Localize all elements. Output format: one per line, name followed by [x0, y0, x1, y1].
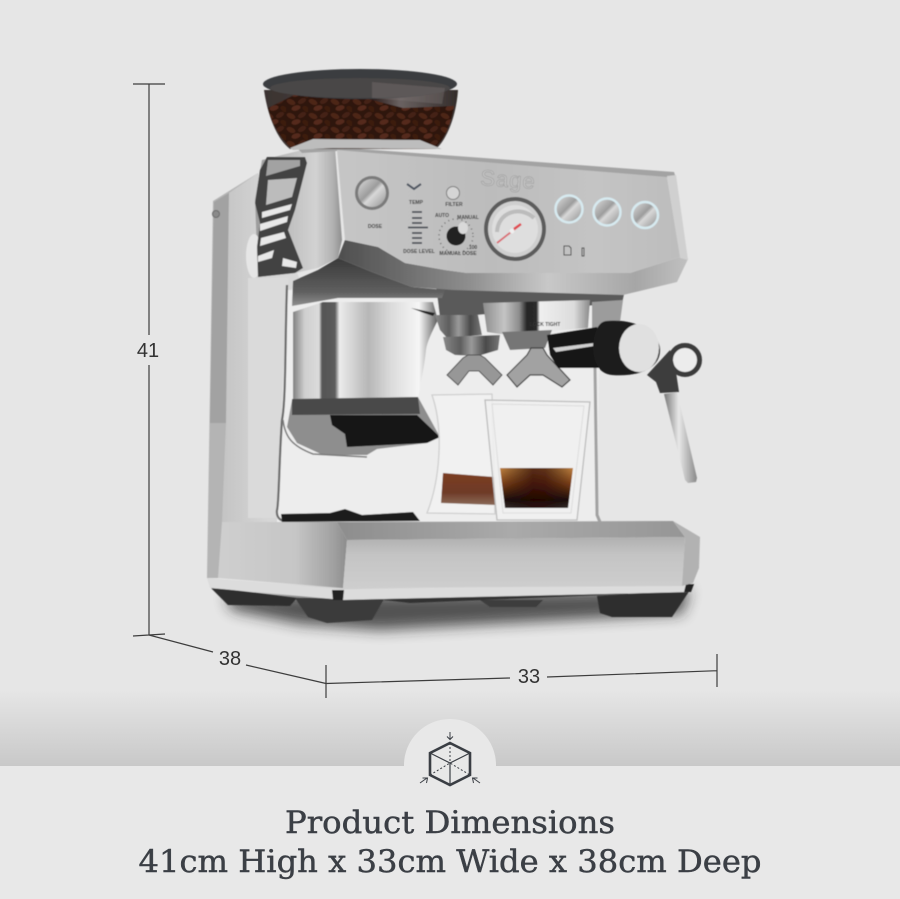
gauge chrome ring [488, 201, 542, 257]
status icons [564, 246, 584, 256]
left glass coffee [441, 473, 496, 505]
panel labels: AUTO [435, 213, 449, 219]
column upper lighter block [248, 278, 288, 518]
milk jug cradle [287, 397, 440, 455]
icon badge semicircle [404, 719, 496, 767]
rear water tank side [207, 173, 282, 578]
middle foot [480, 600, 543, 607]
width label: 33 [518, 666, 540, 688]
grinder outlet [435, 315, 482, 338]
cube hidden edges [430, 743, 470, 775]
lower left base corner [218, 522, 347, 588]
right glass coffee [500, 468, 573, 508]
wand joint [647, 350, 679, 393]
panel labels: LOCK TIGHT [530, 322, 560, 328]
footer dimensions text: 41cm High x 33cm Wide x 38cm Deep [138, 844, 762, 880]
panel labels: TEMP [409, 200, 424, 206]
pressure gauge [484, 197, 546, 261]
panel controls [356, 165, 658, 328]
height label: 41 [137, 340, 159, 362]
width line [326, 654, 717, 698]
right glass inner wall [492, 404, 584, 513]
back panel interior [277, 290, 600, 522]
wand pipe [664, 392, 697, 483]
bean hopper [263, 69, 458, 150]
footer panel [0, 766, 900, 899]
left glass outline [427, 394, 495, 514]
steam arm [547, 327, 605, 368]
grinder collar [290, 139, 442, 150]
head right facet [667, 175, 688, 260]
button three [632, 202, 658, 228]
panel labels: DOSE [368, 224, 383, 230]
hopper bowl [264, 90, 458, 149]
gauge face [492, 205, 538, 253]
panel labels: FILTER [445, 202, 463, 208]
right spouts [507, 348, 570, 387]
depth label: 38 [219, 648, 241, 670]
Sage logo: Sage [480, 165, 537, 194]
temperature chevron [407, 184, 421, 189]
filter button [446, 186, 460, 200]
head top edge [293, 144, 676, 178]
head chamfer [338, 240, 688, 295]
dose knob [356, 178, 388, 208]
right glass outline [485, 400, 590, 520]
icon: dimensions cube [420, 732, 480, 785]
portafilter [447, 348, 570, 387]
chute bump [246, 234, 262, 278]
height line [133, 84, 165, 636]
group head [483, 300, 590, 334]
chute chrome housing [255, 157, 307, 277]
rear foot [210, 587, 297, 606]
gauge needle [497, 225, 520, 243]
thin right rod [595, 368, 600, 522]
needle hub [510, 229, 514, 233]
chute reflections [258, 204, 297, 268]
tray front [343, 537, 685, 588]
dial pointer [458, 222, 468, 234]
lid inner shade [270, 78, 450, 98]
left spouts [447, 355, 502, 385]
tank dark strip [210, 193, 229, 423]
button two [594, 198, 620, 226]
arm highlight [553, 343, 594, 352]
coffee machine [207, 69, 700, 623]
steam wand [547, 321, 700, 483]
right foot [597, 590, 690, 617]
wand handle ring [670, 346, 700, 374]
milk jug body [293, 302, 438, 401]
manual dose dial [439, 219, 473, 253]
group head right bracket [592, 300, 623, 330]
gauge bezel [484, 197, 546, 261]
chrome strip dark accents [332, 584, 694, 600]
machine head side [255, 148, 342, 277]
panel labels: 100 [469, 245, 477, 251]
interior left rails [277, 285, 290, 522]
panel labels [368, 200, 560, 328]
gauge arc [497, 211, 534, 232]
button one [556, 196, 582, 222]
dial ticks [439, 219, 473, 253]
jug lip shadow [411, 308, 435, 316]
cube outline [430, 743, 470, 785]
front left foot [295, 598, 384, 623]
under-head shadow band [436, 285, 625, 318]
hopper lid [263, 69, 457, 99]
needle tip [514, 224, 521, 229]
front control panel [337, 150, 680, 273]
panel labels: MANUAL [457, 215, 479, 221]
jug dark band [292, 397, 420, 415]
depth line [149, 635, 326, 684]
hopper glass highlight [372, 82, 445, 104]
grinder outlet ring [443, 335, 500, 356]
dose level bars [408, 212, 428, 243]
dial body [446, 226, 466, 246]
group ring [502, 330, 552, 350]
coffee beans [268, 88, 454, 149]
left glass [427, 394, 496, 514]
footer heading: Product Dimensions [285, 805, 615, 841]
jug cradle outer chrome [283, 420, 367, 457]
floor shadow under machine [225, 590, 690, 630]
steam knob housing [593, 321, 660, 375]
grinder chute [246, 157, 307, 278]
tank screw [212, 210, 220, 218]
icon arrows [420, 732, 480, 783]
dimension lines [133, 84, 717, 698]
chrome base strip [207, 578, 693, 600]
coffee dark core [500, 468, 573, 508]
tray right end cap [673, 521, 700, 586]
cube front edges [430, 753, 470, 785]
tray top [337, 521, 685, 540]
gradient band above footer [0, 690, 900, 767]
front column [222, 173, 300, 522]
feet [210, 587, 690, 623]
panel labels: DOSE LEVEL [403, 249, 435, 255]
right glass [485, 400, 590, 520]
steam knob face [619, 324, 659, 372]
panel labels: MANUAL DOSE [439, 251, 477, 257]
chute top reflection [266, 160, 300, 176]
drip reflection [281, 509, 420, 522]
jug dark tray [330, 415, 440, 447]
under-tray shadow strip [384, 590, 628, 603]
under-head gasket [292, 258, 445, 306]
chute window [266, 178, 297, 205]
